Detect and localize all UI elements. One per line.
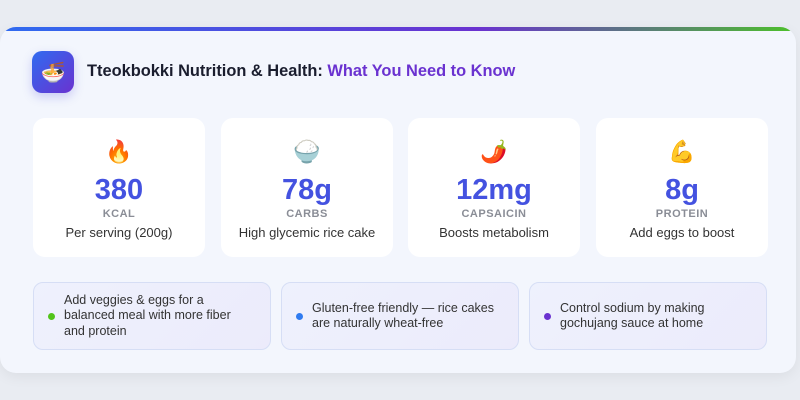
- stat: carbs: CARBS: [286, 208, 328, 220]
- stat: calories: [33, 118, 205, 257]
- icon: noodle bowl: [32, 51, 74, 93]
- stat: carbs: [221, 118, 393, 257]
- stat: capsaicin: Boosts metabolism: [439, 225, 549, 240]
- tip: veggies: Add veggies & eggs for a balanced meal with more fiber and protein: [64, 293, 231, 338]
- stat: calories: 🔥: [105, 139, 133, 164]
- title: Tteokbokki Nutrition & Health: What You Need to Know: [87, 62, 515, 80]
- stat: carbs: High glycemic rice cake: [239, 225, 375, 240]
- tip: gluten-free: [281, 282, 519, 350]
- tip: sodium: [529, 282, 767, 350]
- tip: gluten-free: Gluten-free friendly — rice cakes are naturally wheat-free: [312, 300, 494, 330]
- tip: veggies: [33, 282, 271, 350]
- stat: calories: KCAL: [103, 208, 135, 220]
- tip: sodium: Control sodium by making gochujang sauce at home: [560, 300, 705, 330]
- stat: calories: 380: [95, 174, 143, 206]
- stat: calories: Per serving (200g): [66, 225, 172, 240]
- stat: protein: Add eggs to boost: [630, 225, 734, 240]
- stat: capsaicin: CAPSAICIN: [461, 208, 526, 220]
- stat: carbs: 78g: [282, 174, 332, 206]
- stat: protein: PROTEIN: [656, 208, 708, 220]
- stat: capsaicin: [408, 118, 580, 257]
- stat: protein: [596, 118, 768, 257]
- stat: capsaicin: 12mg: [456, 174, 532, 206]
- icon: noodle bowl: 🍜: [41, 62, 65, 84]
- stat: carbs: 🍚: [293, 139, 321, 164]
- stat: protein: 8g: [665, 174, 699, 206]
- stat: protein: 💪: [668, 139, 696, 164]
- stat: capsaicin: 🌶️: [480, 139, 508, 164]
